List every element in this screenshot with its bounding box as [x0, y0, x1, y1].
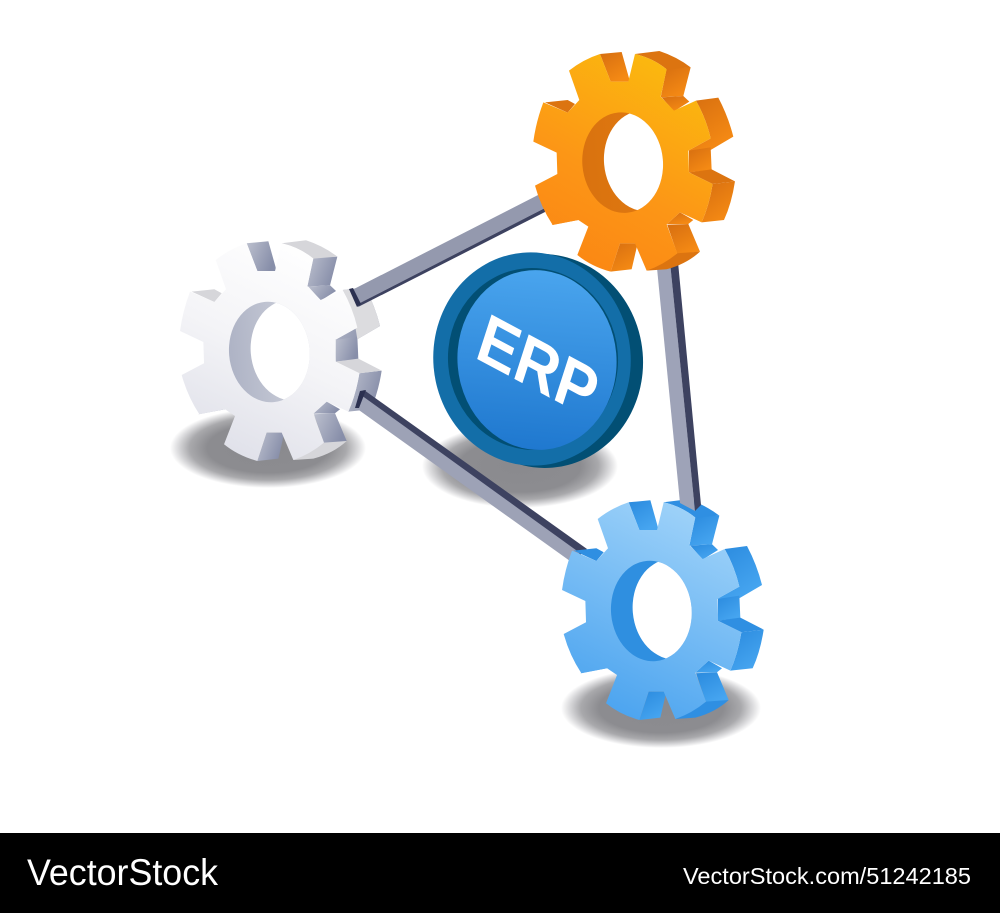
- shadow: white gear: [170, 408, 366, 488]
- rod: orange gear to blue gear: [657, 262, 701, 511]
- label: ERP: ERP: [469, 299, 607, 432]
- rod: white gear to orange gear: [349, 194, 545, 307]
- disc rim shadow side: [435, 246, 652, 476]
- ERP disc: [424, 244, 652, 476]
- shadow: blue gear: [561, 668, 761, 748]
- footer logo text: VectorStock: [27, 852, 218, 893]
- disc face: [450, 263, 624, 457]
- gear: orange: [533, 51, 735, 272]
- gear: blue: [562, 499, 764, 720]
- footer bar: [0, 833, 1000, 913]
- rod: white gear to blue gear: [355, 390, 587, 561]
- disc recess: [440, 261, 626, 457]
- footer image id: VectorStock.com/51242185: [683, 863, 971, 889]
- gear: white: [180, 240, 382, 461]
- shadow: ERP disc: [422, 424, 618, 508]
- disc rim: [424, 244, 640, 474]
